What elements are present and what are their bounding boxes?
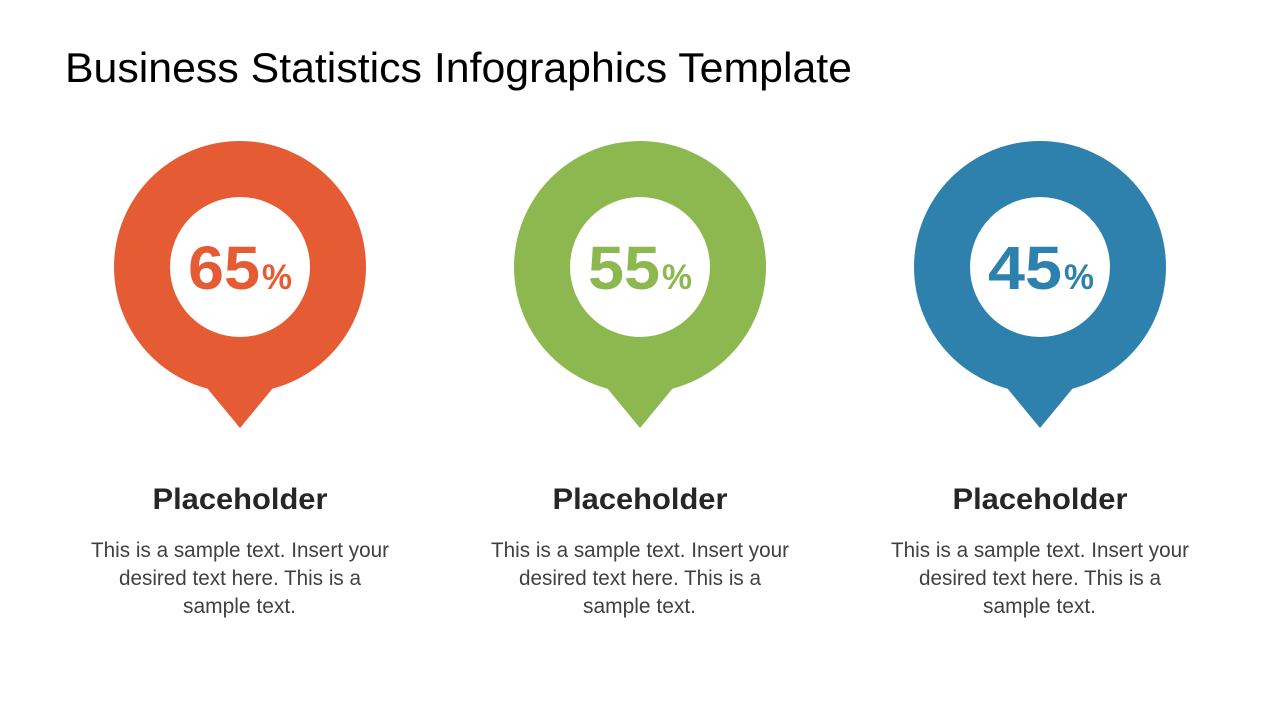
icon: blue map pin (914, 141, 1166, 428)
number: 45%: 45 (988, 234, 1062, 302)
icon: orange map pin (114, 141, 366, 428)
text block: This is a sample text. Insert your (491, 539, 789, 562)
text block (891, 539, 1189, 618)
heading: placeholder: Placeholder (152, 483, 328, 516)
heading: placeholder: Placeholder (952, 483, 1128, 516)
heading: placeholder: Placeholder (552, 483, 728, 516)
text block: sample text. (583, 595, 696, 618)
number: 45%: % (1064, 258, 1094, 297)
number: 65%: 65 (188, 234, 260, 302)
icon: green map pin (514, 141, 766, 428)
text block: sample text. (183, 595, 296, 618)
number: 55%: 55 (588, 234, 660, 302)
text block: desired text here. This is a (919, 567, 1161, 590)
text block: sample text. (983, 595, 1096, 618)
title: Business Statistics Infographics Template (65, 44, 852, 91)
text block: desired text here. This is a (119, 567, 361, 590)
text block: This is a sample text. Insert your (891, 539, 1189, 562)
text block (91, 539, 389, 618)
text block (491, 539, 789, 618)
panel: 55% statistic (491, 141, 789, 618)
text block: This is a sample text. Insert your (91, 539, 389, 562)
number: 65%: % (262, 258, 292, 297)
panel: 45% statistic (891, 141, 1189, 618)
number: 55%: % (662, 258, 692, 297)
panel: 65% statistic (91, 141, 389, 618)
text block: desired text here. This is a (519, 567, 761, 590)
